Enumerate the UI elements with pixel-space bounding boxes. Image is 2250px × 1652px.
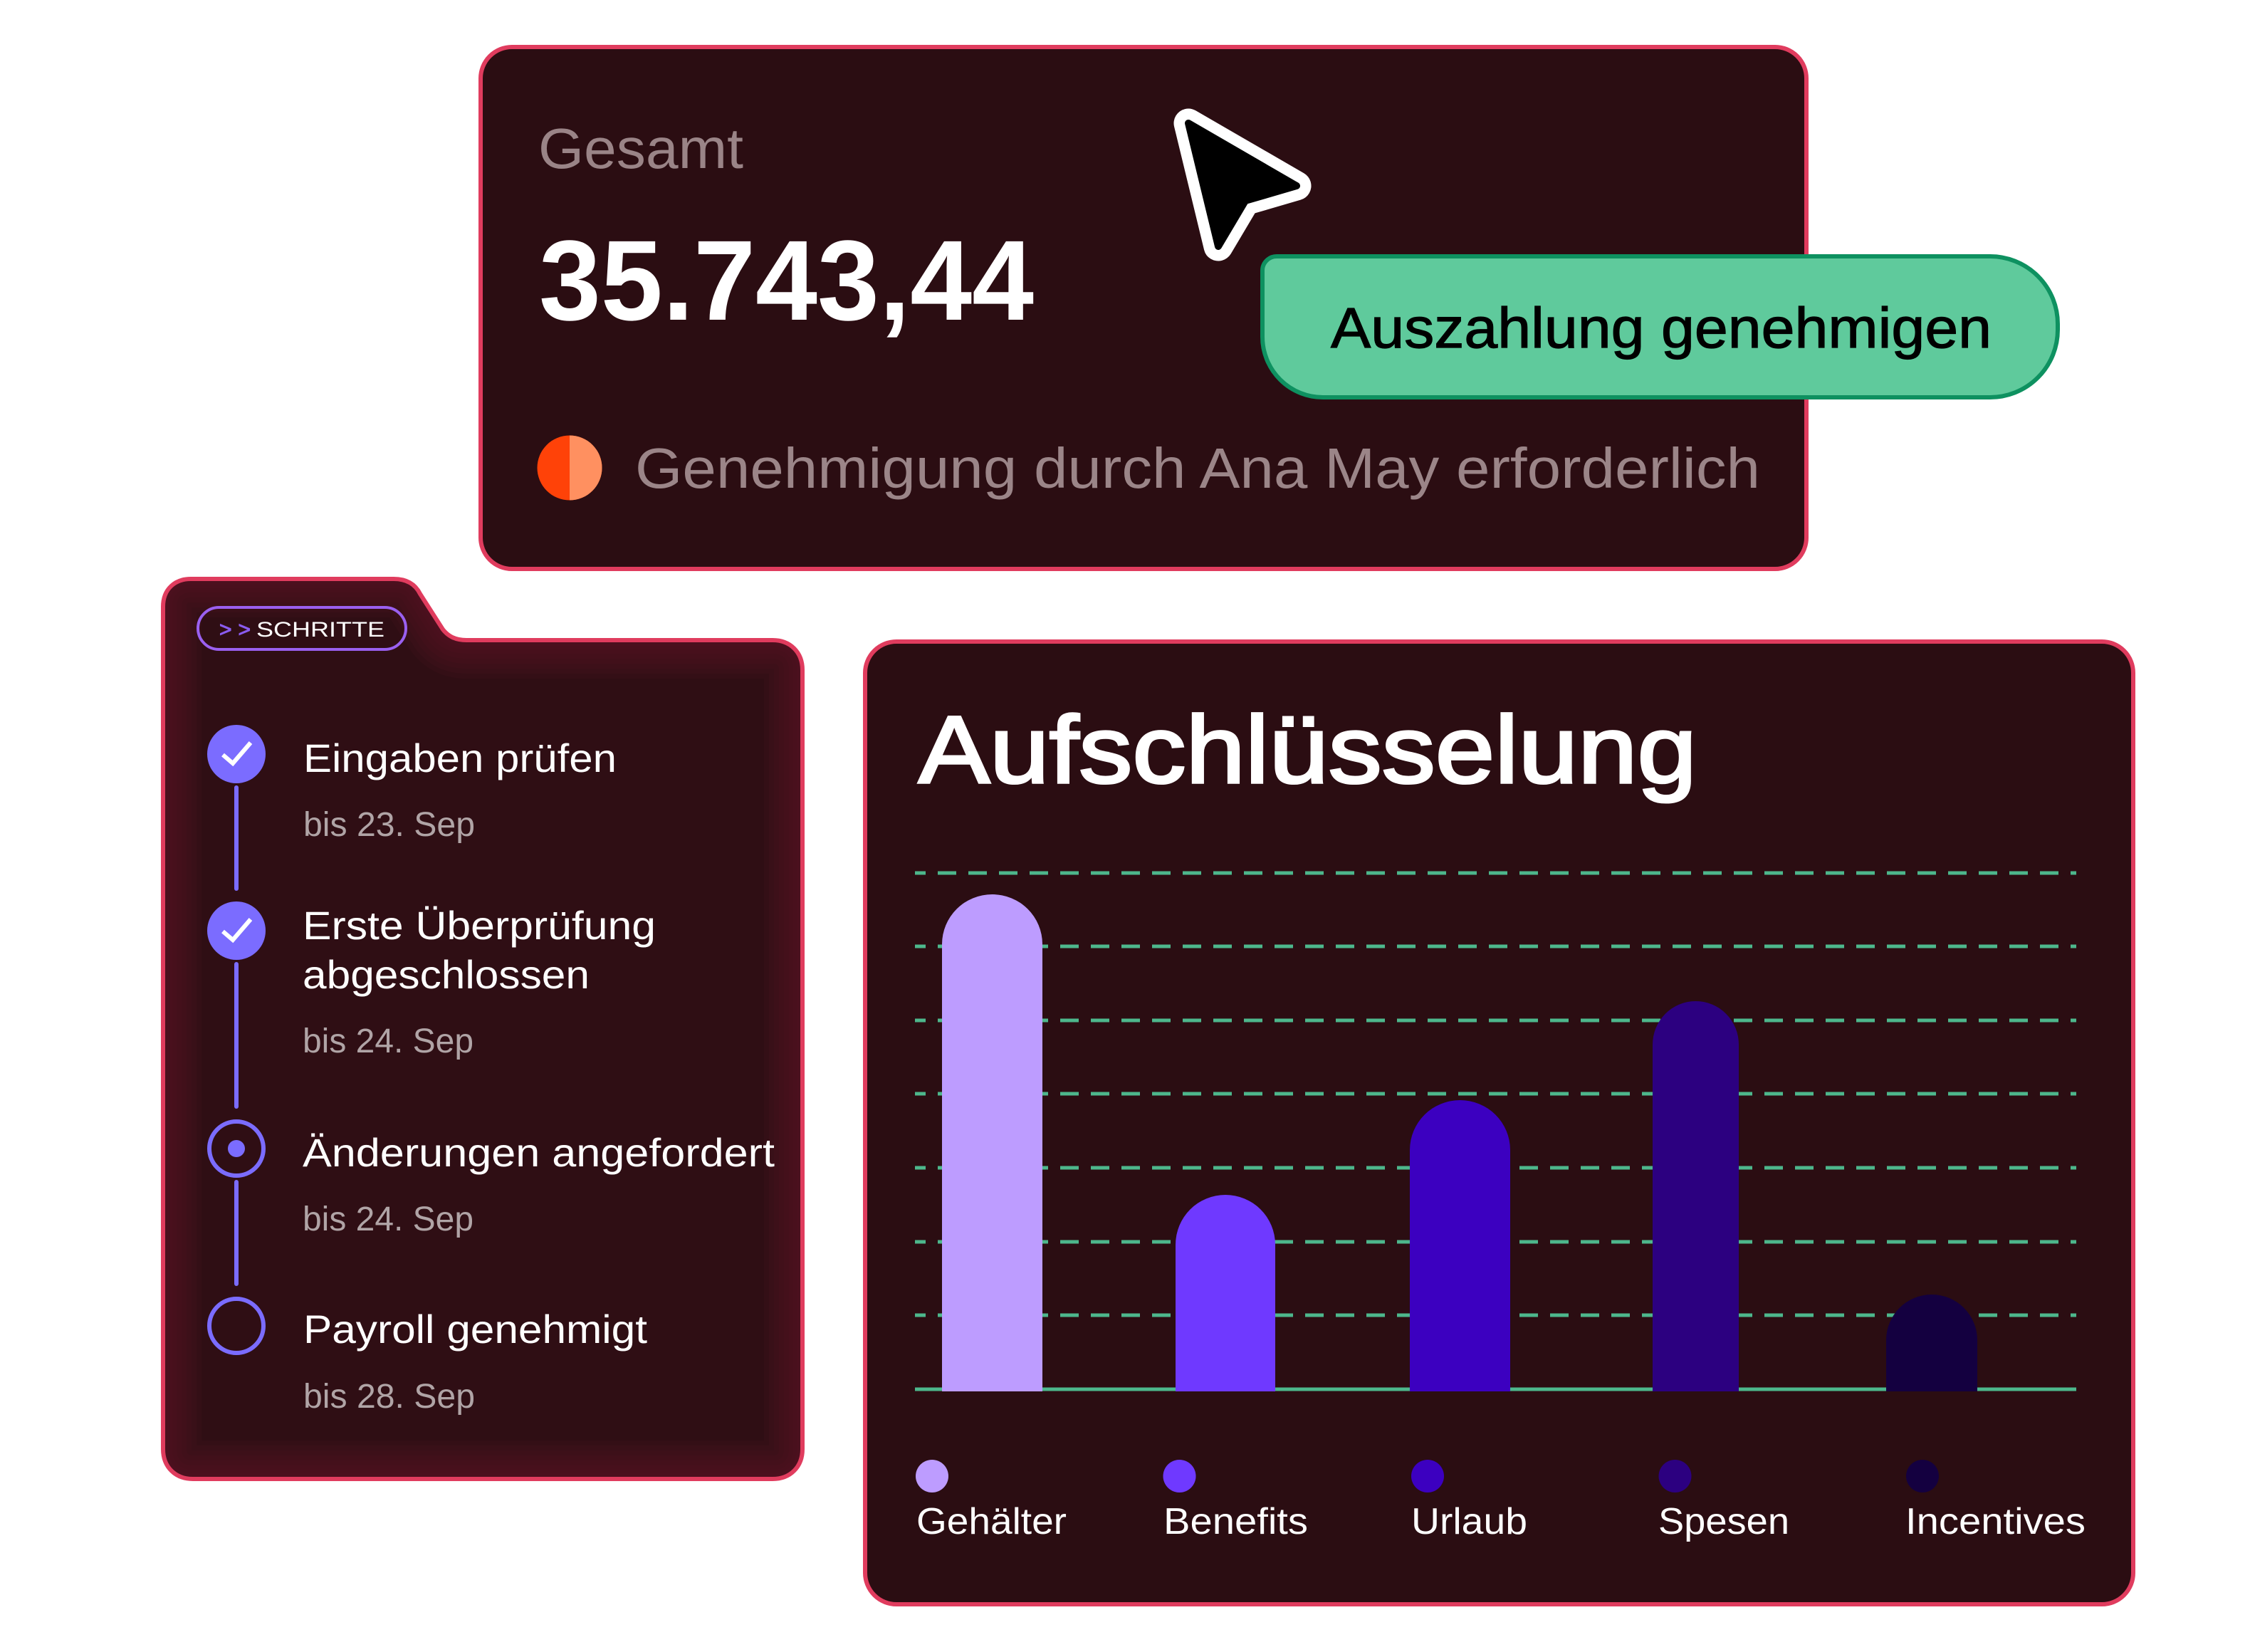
- step 3 title: Änderungen angefordert: [303, 1130, 775, 1175]
- legend item: Spesen: Spesen: [1658, 1501, 1789, 1542]
- button: approve payout: [1262, 256, 2058, 397]
- heading: Aufschlüsselung: [919, 697, 1697, 803]
- step 2 date: bis 24. Sep: [303, 1023, 473, 1060]
- legend: [916, 1460, 2086, 1542]
- step 4 marker: [209, 1299, 263, 1353]
- legend item: Benefits: [1163, 1460, 1308, 1542]
- bar: Incentives: [1886, 1295, 1977, 1391]
- step 2 title: abgeschlossen: [303, 952, 590, 997]
- panel background: [481, 47, 1806, 569]
- step 1 title: Eingaben prüfen: [303, 736, 617, 780]
- step 3 marker: [209, 1122, 263, 1176]
- legend item: Incentives: [1905, 1460, 2086, 1542]
- legend item: Urlaub: [1411, 1460, 1527, 1542]
- bar: Benefits: [1176, 1195, 1275, 1391]
- legend item: Incentives: Incentives: [1905, 1501, 2086, 1542]
- inner edge glow: [163, 579, 802, 1479]
- step 4 title: Payroll genehmigt: [303, 1307, 647, 1352]
- button shape: [1262, 256, 2058, 397]
- badge: Schritte: [198, 607, 406, 649]
- panel: breakdown: [865, 642, 2133, 1604]
- step 4 date: bis 28. Sep: [303, 1378, 475, 1416]
- panel: total: [481, 47, 1806, 569]
- step 2 title: [303, 903, 656, 997]
- step 3 date: bis 24. Sep: [303, 1201, 473, 1238]
- folder border: [163, 579, 802, 1479]
- legend item: Benefits: Benefits: [1163, 1501, 1308, 1542]
- step 2 title: Erste Überprüfung: [303, 903, 656, 948]
- label: Gesamt: Gesamt: [538, 117, 743, 180]
- folder background: [163, 579, 802, 1479]
- panel: steps: [163, 579, 802, 1479]
- connector 3: [234, 1182, 239, 1284]
- connector 1: [234, 788, 239, 889]
- legend item: Gehälter: [916, 1460, 1067, 1542]
- icon: half status dot: [537, 436, 602, 500]
- connector 2: [234, 964, 239, 1107]
- bar: Urlaub: [1410, 1100, 1510, 1391]
- approval note: Genehmigung durch Ana May erforderlich: [635, 436, 1760, 500]
- amount: 35.743,44: [539, 216, 1034, 344]
- step 1 marker: [207, 725, 266, 783]
- bar: Spesen: [1653, 1001, 1739, 1391]
- icon: cursor arrow: [1188, 123, 1297, 246]
- panel background: [865, 642, 2133, 1604]
- legend item: Urlaub: Urlaub: [1411, 1501, 1527, 1542]
- step 2 marker: [207, 901, 266, 960]
- bar chart: [915, 873, 2076, 1391]
- step 1 date: bis 23. Sep: [303, 806, 475, 844]
- button label: Auszahlung genehmigen: [1331, 296, 1992, 360]
- badge: Schritte: >>: [219, 618, 251, 642]
- bar: Gehälter: [942, 894, 1042, 1391]
- badge: Schritte: SCHRITTE: [256, 618, 384, 642]
- legend item: Spesen: [1658, 1460, 1789, 1542]
- legend item: Gehälter: Gehälter: [916, 1501, 1067, 1542]
